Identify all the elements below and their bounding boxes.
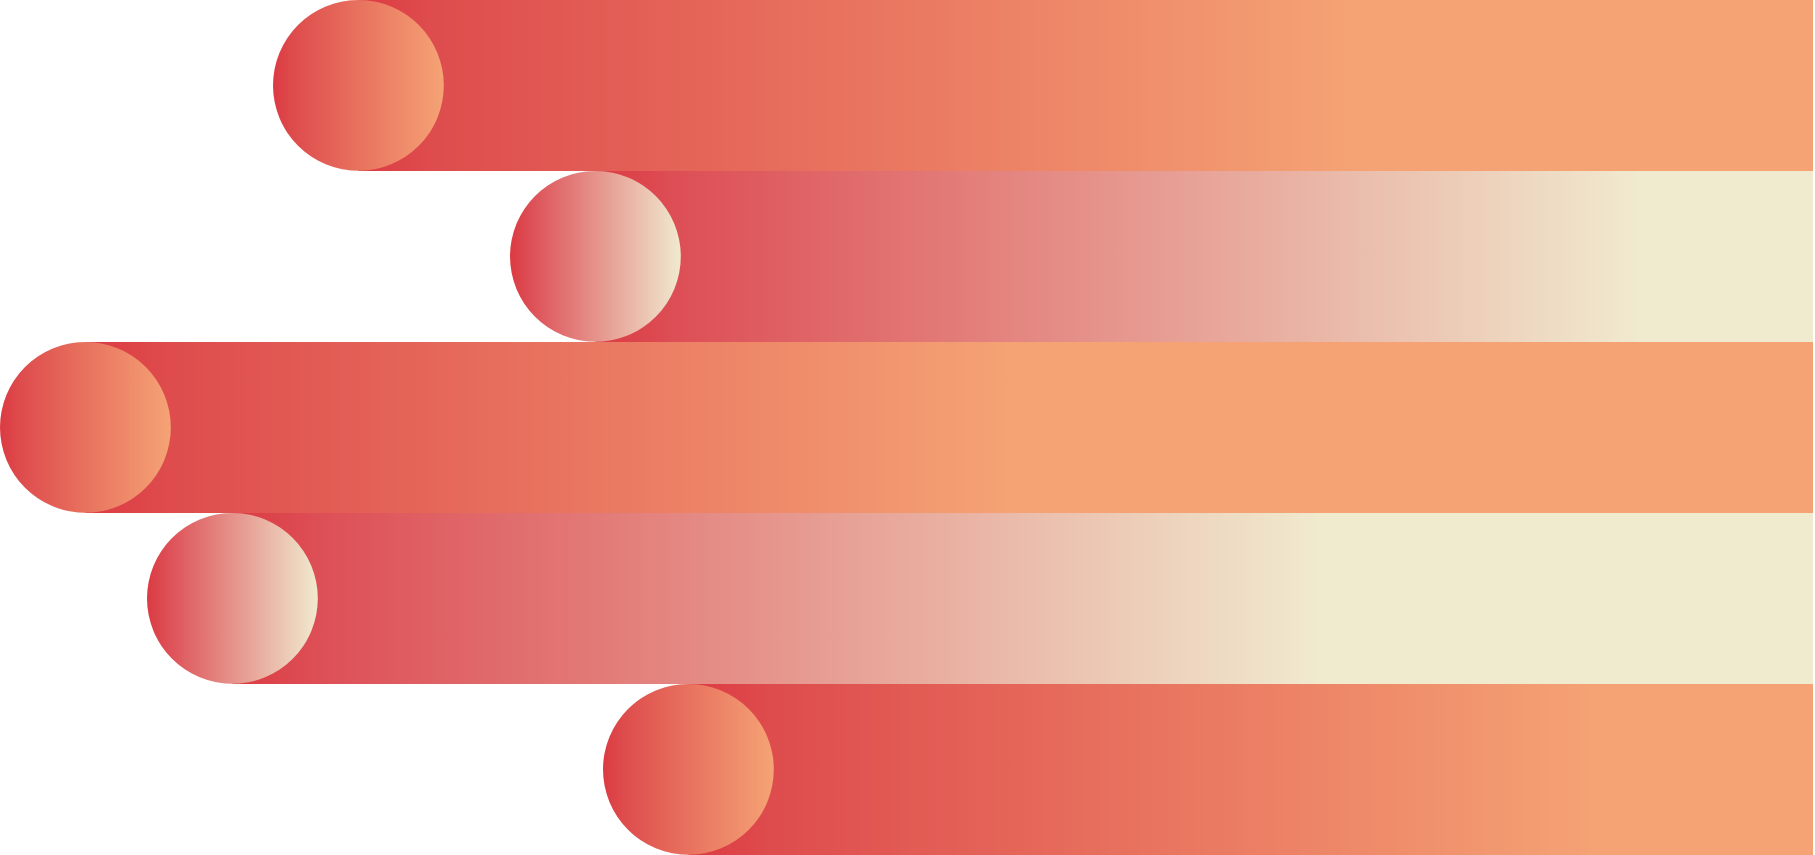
bar row 4: red to cream bbox=[147, 513, 1813, 684]
circle row 2 bbox=[510, 171, 681, 342]
circle row 1 bbox=[273, 0, 444, 171]
bar row 1: red to orange bbox=[273, 0, 1813, 171]
circle row 3 bbox=[0, 342, 171, 513]
circle row 4 bbox=[147, 513, 318, 684]
circle row 5 bbox=[603, 684, 774, 855]
bar row 3: red to orange bbox=[0, 342, 1813, 513]
bar row 2: red to cream bbox=[510, 171, 1813, 342]
bar row 5: red to orange bbox=[603, 684, 1813, 855]
